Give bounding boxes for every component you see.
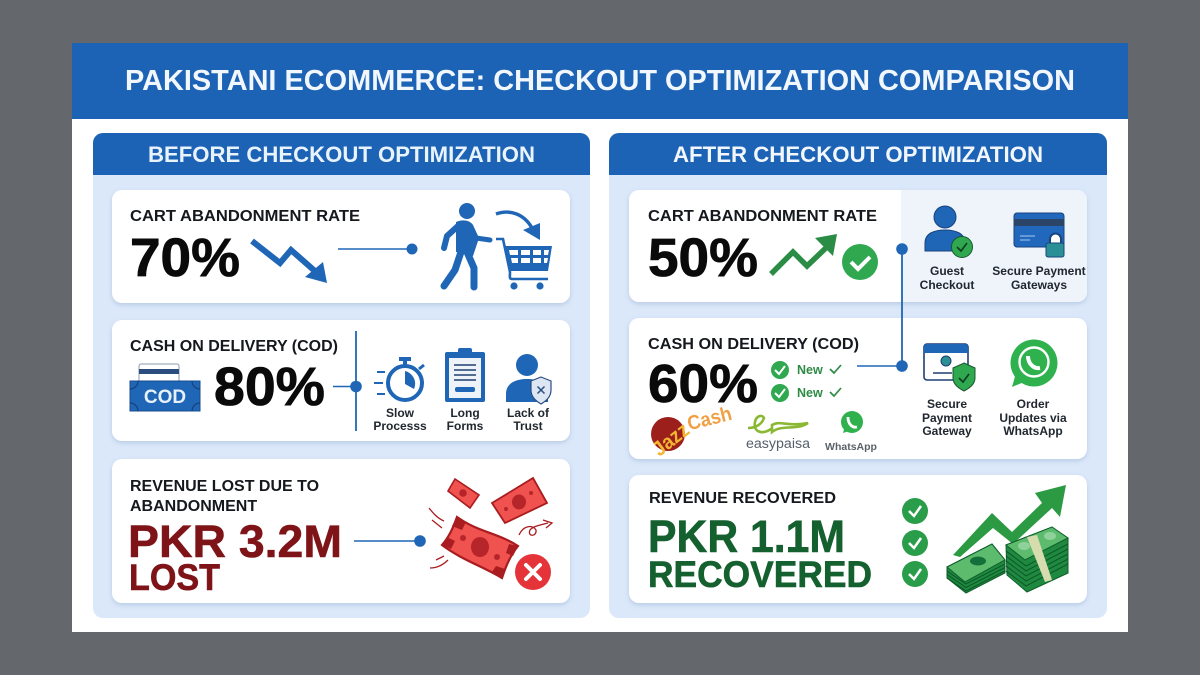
panel heading: after: AFTER CHECKOUT OPTIMIZATION [673, 142, 1043, 167]
heading: cash on delivery: CASH ON DELIVERY (COD) [130, 338, 338, 355]
stat: 70%: 70% [130, 228, 240, 288]
label: order updates via WhatsApp: Updates via [999, 411, 1067, 425]
new feature ticks: New [797, 386, 823, 400]
panel heading: after [609, 133, 1107, 175]
logo: JazzCash [648, 403, 734, 461]
logo: easypaisa: easypaisa [746, 436, 811, 451]
stat: 80%: 80% [214, 357, 325, 417]
new feature ticks: New [797, 363, 823, 377]
card: revenue recovered [629, 475, 1087, 603]
icon: growth arrow and cash stacks [947, 485, 1068, 593]
logo: WhatsApp [825, 411, 877, 453]
logo: JazzCash: Cash [685, 403, 734, 435]
icon: person walking away from cart [444, 203, 490, 287]
label: order updates via WhatsApp: Order [1017, 397, 1050, 411]
stat: PKR 1.1M recovered: RECOVERED [648, 554, 872, 595]
stat: 50%: 50% [648, 228, 758, 288]
label: order updates via WhatsApp: WhatsApp [1003, 424, 1063, 438]
label: guest checkout: Checkout [920, 278, 974, 292]
heading: revenue lost due to abandonment: ABANDONMENT [130, 498, 257, 515]
connector line [338, 244, 418, 254]
label: lack of trust: Lack of [507, 406, 550, 420]
icon: COD cash and card [130, 364, 200, 411]
panel: before checkout optimization [93, 133, 590, 618]
card: cash on delivery after [629, 318, 1087, 461]
logo: easypaisa [746, 416, 811, 451]
icon: clipboard form [445, 348, 485, 402]
icon: rising trend arrow [771, 234, 837, 274]
label: secure payment gateway: Gateway [922, 424, 972, 438]
card: cash on delivery before [112, 320, 570, 441]
label: lack of trust: Trust [513, 419, 543, 433]
icon: shopping cart [496, 212, 552, 290]
card: revenue lost [112, 459, 570, 603]
icon: flying red money [429, 478, 552, 590]
label: guest checkout: Guest [930, 264, 964, 278]
heading: revenue lost due to abandonment: REVENUE LOST DUE TO [130, 478, 319, 495]
stat: PKR 3.2M lost: PKR 3.2M [128, 516, 342, 567]
connector with divider [333, 331, 362, 431]
connector line [354, 535, 426, 547]
title banner [72, 43, 1128, 119]
stat: PKR 1.1M recovered: PKR 1.1M [648, 511, 845, 562]
label: long forms: Long [450, 406, 480, 420]
stat: 60%: 60% [648, 354, 758, 414]
logo: JazzCash: Jazz [648, 418, 694, 461]
icons: three check marks [902, 498, 928, 587]
icon: person with shield [506, 354, 551, 404]
label: secure payment gateway: Secure [927, 397, 967, 411]
heading: cash on delivery: CASH ON DELIVERY (COD) [648, 336, 859, 353]
card: cart abandonment after [629, 190, 1087, 302]
icon: stopwatch [374, 357, 424, 400]
icon: arrow head down [305, 262, 327, 283]
heading: cart abandonment rate: CART ABANDONMENT RATE [130, 208, 360, 225]
stat: PKR 1.1M recovered [648, 511, 872, 595]
label: slow process: Slow [386, 406, 415, 420]
label: slow process: Processs [373, 419, 427, 433]
icon: secure payment window [924, 344, 975, 391]
heading: revenue recovered: REVENUE RECOVERED [649, 490, 836, 507]
stat: PKR 3.2M lost: LOST [129, 557, 220, 598]
title banner: PAKISTANI ECOMMERCE: CHECKOUT OPTIMIZATION COMPARISON [125, 65, 1075, 97]
new feature ticks [771, 361, 841, 402]
card: cart abandonment before [112, 190, 570, 303]
label: secure payment gateway: Payment [922, 411, 972, 425]
label: secure payment gateways: Secure Payment [992, 264, 1086, 278]
icon: COD cash and card: COD [144, 387, 186, 408]
connector: after panel vertical line [857, 243, 908, 372]
panel heading: before [93, 133, 590, 175]
label: long forms: Forms [447, 419, 484, 433]
logo: WhatsApp: WhatsApp [825, 441, 877, 453]
icon: guest checkout [925, 206, 972, 258]
icon: green check [842, 244, 878, 280]
panel heading: before: BEFORE CHECKOUT OPTIMIZATION [148, 142, 535, 167]
icon: WhatsApp [1010, 340, 1058, 387]
icon: secure card [1014, 213, 1064, 257]
icon: falling trend arrow [252, 241, 316, 272]
panel: after checkout optimization [609, 133, 1107, 618]
heading: cart abandonment rate: CART ABANDONMENT RATE [648, 208, 877, 225]
stat: PKR 3.2M lost [128, 516, 342, 598]
label: secure payment gateways: Gateways [1011, 278, 1067, 292]
